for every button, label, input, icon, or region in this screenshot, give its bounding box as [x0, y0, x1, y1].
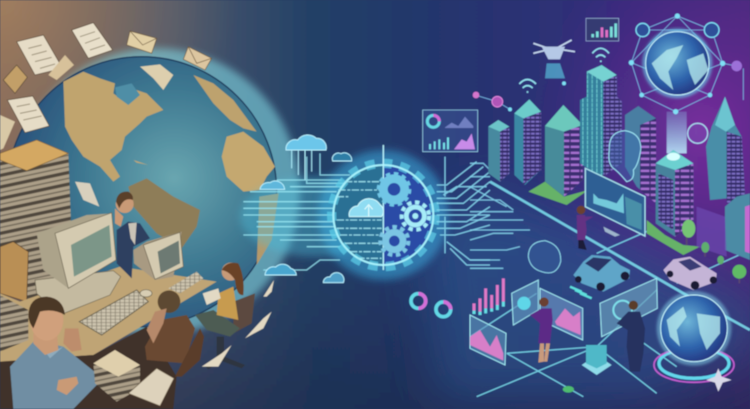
bottom green node: [563, 386, 574, 393]
top glowing globe: [642, 28, 712, 98]
green lots: [528, 182, 700, 255]
network nodes: [473, 13, 742, 114]
bar chart top: [586, 18, 619, 41]
front paper piles: [93, 350, 174, 406]
drone: [533, 40, 575, 78]
flying paper 2: [72, 23, 113, 58]
left paper pile: [0, 295, 28, 352]
gear wheel: [332, 145, 435, 270]
woman presenter: [530, 297, 553, 363]
world globe: [7, 57, 279, 327]
dashboard panel: [423, 110, 478, 152]
holo panel center: [540, 288, 583, 340]
panel: central digital transformation: [240, 110, 490, 317]
side folders: [0, 242, 28, 302]
hologram ring: [688, 123, 708, 143]
tower behind hologram head: [625, 106, 656, 203]
left cloud icons: [260, 135, 352, 283]
under desk shadow: [0, 327, 177, 409]
data stream glow: [240, 177, 393, 257]
right low building: [697, 193, 750, 260]
data streams: [243, 153, 350, 270]
silver car: [663, 257, 717, 290]
city light streets: [470, 182, 750, 397]
gear icon middle: [402, 202, 429, 230]
holo panel left: [512, 280, 538, 325]
central tall tower: [580, 65, 622, 177]
small CRT monitor: [133, 232, 203, 293]
flying envelope 2: [183, 47, 212, 70]
bottom globe base rings: [654, 348, 734, 382]
gear icon top: [379, 174, 409, 205]
crosswalk bars: [570, 287, 592, 298]
light beam: [667, 112, 687, 153]
tower 2: [514, 99, 541, 185]
gear cloud icon: [349, 199, 383, 217]
network top right: [475, 16, 743, 112]
seated man with head in hand: [145, 290, 204, 377]
flying folder 2: [48, 55, 74, 80]
central pedestal: [582, 345, 612, 375]
circuit traces into city: [470, 163, 530, 268]
center right building: [656, 150, 693, 237]
office desk: [0, 267, 217, 367]
central glow: [318, 150, 448, 280]
brain hologram: [528, 241, 561, 273]
flying paper 5: [75, 182, 99, 207]
flying folder: [3, 65, 27, 93]
tower 3: [545, 105, 583, 197]
front man with phone: [10, 297, 98, 409]
cloud rain lines: [292, 150, 312, 180]
corner sparkle: [706, 368, 732, 392]
tower 1: [488, 120, 509, 182]
holo panel right: [600, 278, 657, 337]
holo panel lower left: [470, 315, 506, 365]
paper text lines: [17, 32, 105, 120]
donut charts: [411, 294, 451, 317]
computer base: [35, 271, 121, 315]
woman with monitor: [577, 206, 593, 250]
circuit traces: [437, 157, 490, 265]
code lines in gear: [337, 182, 382, 258]
upload arrow: [365, 205, 373, 217]
panel: smart city: [470, 13, 750, 397]
right spire tower: [706, 97, 745, 203]
keyboard: [79, 290, 148, 335]
man on phone in suit: [115, 192, 150, 278]
man presenter: [617, 301, 645, 372]
globe glow: [13, 48, 300, 335]
bottom glowing globe: [657, 291, 731, 366]
woman reading at chair: [195, 263, 255, 369]
flying paper 3: [7, 96, 49, 133]
flying paper 4: [0, 115, 15, 150]
flying envelope 1: [127, 31, 157, 53]
hologram head: [609, 131, 641, 182]
stack of papers: [0, 140, 72, 300]
monitor dashboard: [585, 168, 645, 237]
large CRT monitor: [37, 213, 116, 288]
city floor: [420, 190, 750, 400]
wifi icons: [519, 48, 609, 92]
trees: [682, 220, 746, 283]
blue car: [573, 255, 630, 292]
bar chart lower left: [474, 278, 503, 315]
loose falling papers: [202, 280, 274, 367]
mouse: [140, 290, 152, 297]
panel: legacy paper office and globe: [0, 23, 300, 409]
gear icon bottom: [380, 227, 408, 255]
flying paper 1: [17, 35, 63, 75]
